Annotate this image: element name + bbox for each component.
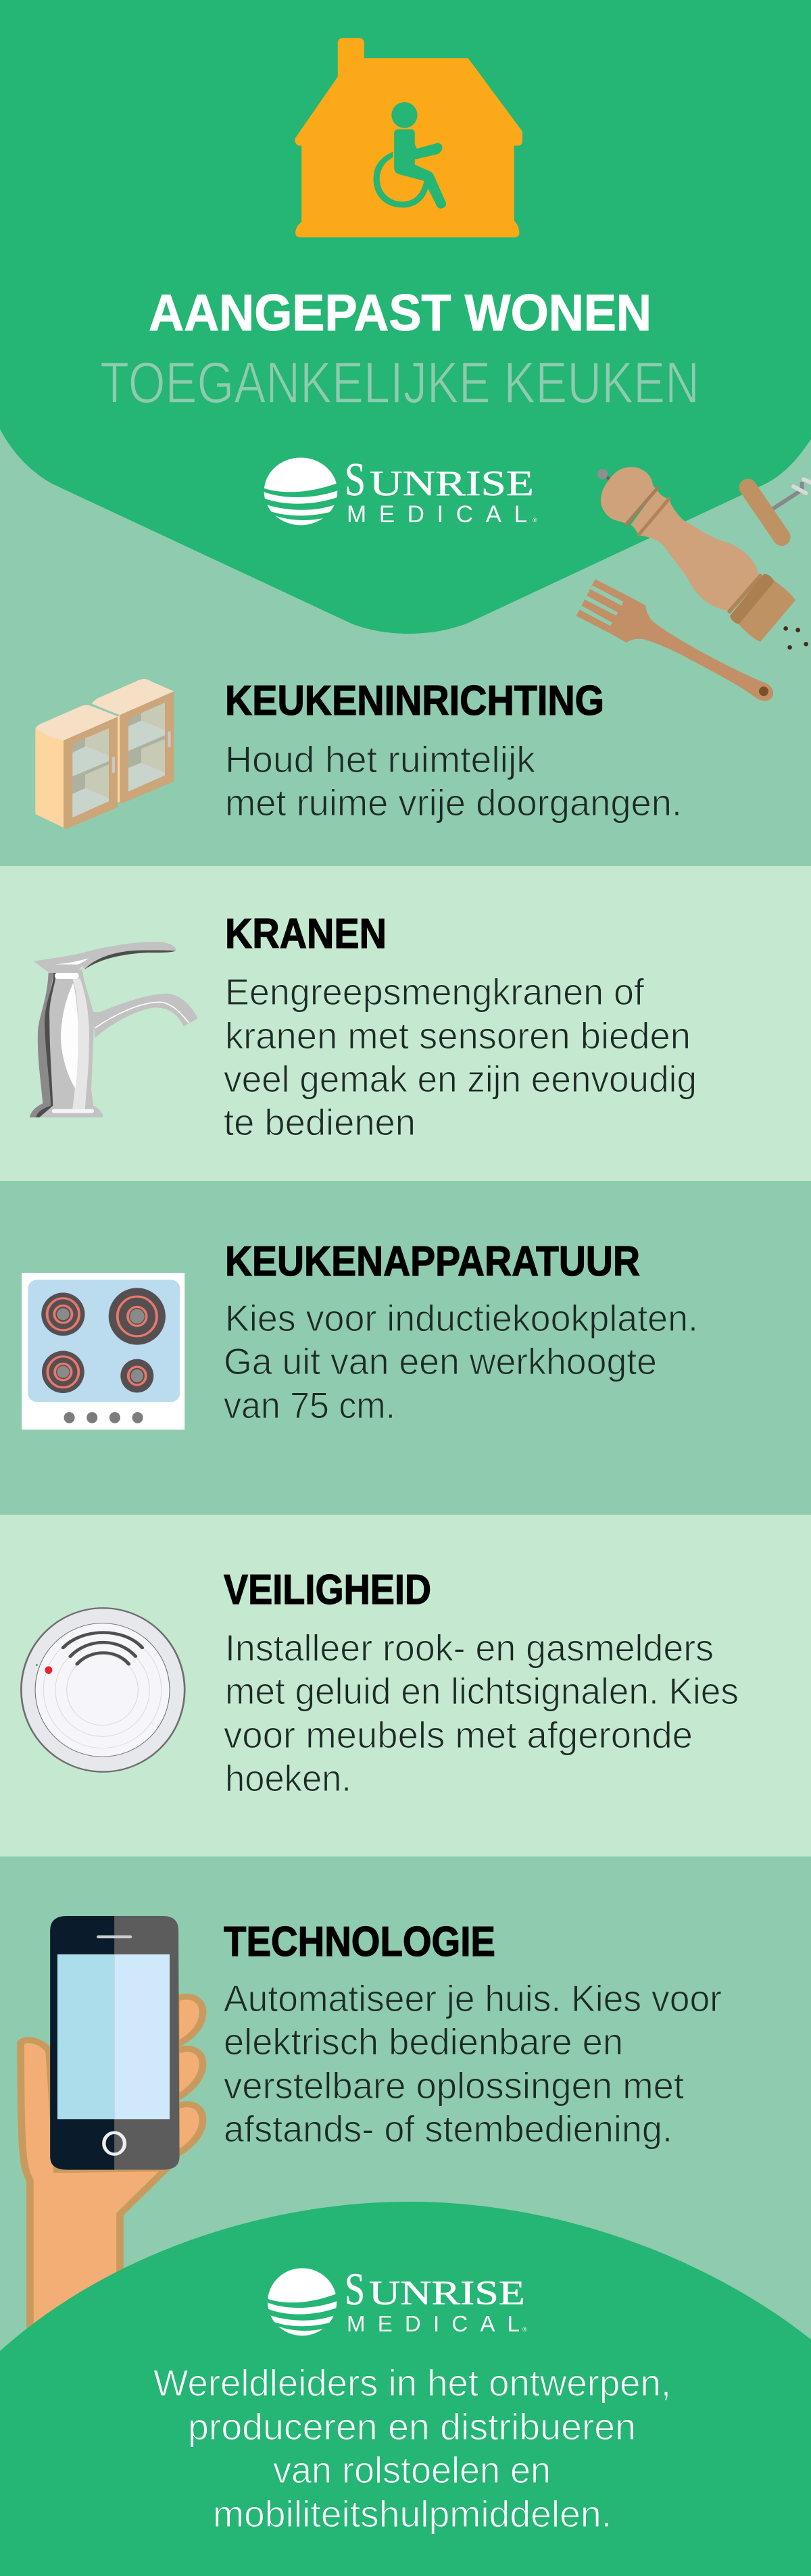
panel: kranen (0, 866, 811, 1181)
logo: Sunrise Medical: MEDICAL (347, 501, 527, 528)
heading: KEUKENINRICHTING (225, 678, 604, 724)
illustration: pepper mill and utensils (576, 467, 811, 701)
logo: Sunrise Medical: UNRISE (370, 464, 534, 503)
text block (225, 738, 682, 824)
text block: kranen met sensoren bieden (225, 1015, 691, 1057)
footer text: van rolstoelen en (273, 2449, 551, 2491)
footer text (153, 2362, 671, 2535)
icon: house with wheelchair user (295, 38, 522, 237)
logo: Sunrise Medical: ® (533, 517, 537, 524)
logo: Sunrise Medical footer: S (345, 2263, 365, 2315)
text block (224, 971, 697, 1143)
header panel (0, 0, 811, 634)
text block: Automatiseer je huis. Kies voor (224, 1977, 722, 2019)
icon: faucet (30, 942, 198, 1117)
text block: Installeer rook- en gasmelders (225, 1627, 714, 1669)
text block: met ruime vrije doorgangen. (225, 782, 682, 824)
text block (224, 1297, 698, 1426)
logo: Sunrise Medical footer: UNRISE (369, 2275, 525, 2313)
panel: technologie (21, 1916, 722, 2335)
logo: Sunrise Medical footer: MEDICAL (347, 2311, 520, 2336)
panel: keukenapparatuur (22, 1238, 698, 1430)
icon: induction cooktop (22, 1273, 185, 1430)
icon: smoke detector (21, 1608, 185, 1772)
title: AANGEPAST WONEN (149, 284, 652, 342)
text block (224, 1627, 739, 1799)
heading: KRANEN (225, 911, 387, 957)
text block: Ga uit van een werkhoogte (224, 1340, 657, 1382)
logo: Sunrise Medical footer: ® (522, 2326, 527, 2333)
icon: hand holding smartphone (21, 1916, 203, 2335)
logo: Sunrise Medical: S (345, 454, 366, 506)
icon: kitchen cabinets (35, 679, 174, 829)
text block: Eengreepsmengkranen of (225, 971, 645, 1013)
text block: Houd het ruimtelijk (225, 738, 536, 780)
heading: TECHNOLOGIE (224, 1919, 495, 1965)
text block: verstelbare oplossingen met (224, 2065, 684, 2106)
text block: te bedienen (224, 1101, 416, 1143)
subtitle: TOEGANKELIJKE KEUKEN (100, 351, 699, 415)
text block: elektrisch bedienbare en (224, 2021, 623, 2063)
icon: wooden fork (576, 579, 773, 701)
text block: met geluid en lichtsignalen. Kies (225, 1670, 739, 1712)
heading: KEUKENAPPARATUUR (225, 1238, 640, 1285)
icon: rolling handle (748, 479, 811, 537)
text block: van 75 cm. (224, 1384, 395, 1426)
heading: VEILIGHEID (224, 1567, 431, 1613)
logo: Sunrise Medical (262, 454, 537, 528)
text block: voor meubels met afgeronde (224, 1714, 693, 1756)
footer text: mobiliteitshulpmiddelen. (213, 2493, 612, 2535)
text block: afstands- of stembediening. (224, 2108, 672, 2150)
footer panel (0, 2202, 811, 2576)
panel: veiligheid (0, 1515, 811, 1857)
text block: veel gemak en zijn eenvoudig (224, 1058, 697, 1100)
text block (224, 1977, 722, 2150)
footer text: produceren en distribueren (188, 2406, 636, 2448)
pepper grains (783, 626, 808, 650)
logo: Sunrise Medical footer (266, 2263, 527, 2336)
icon: pepper mill (597, 467, 795, 642)
text block: hoeken. (225, 1757, 351, 1799)
text block: Kies voor inductiekookplaten. (225, 1297, 698, 1339)
panel: keukeninrichting (35, 678, 682, 829)
footer text: Wereldleiders in het ontwerpen, (153, 2362, 671, 2404)
